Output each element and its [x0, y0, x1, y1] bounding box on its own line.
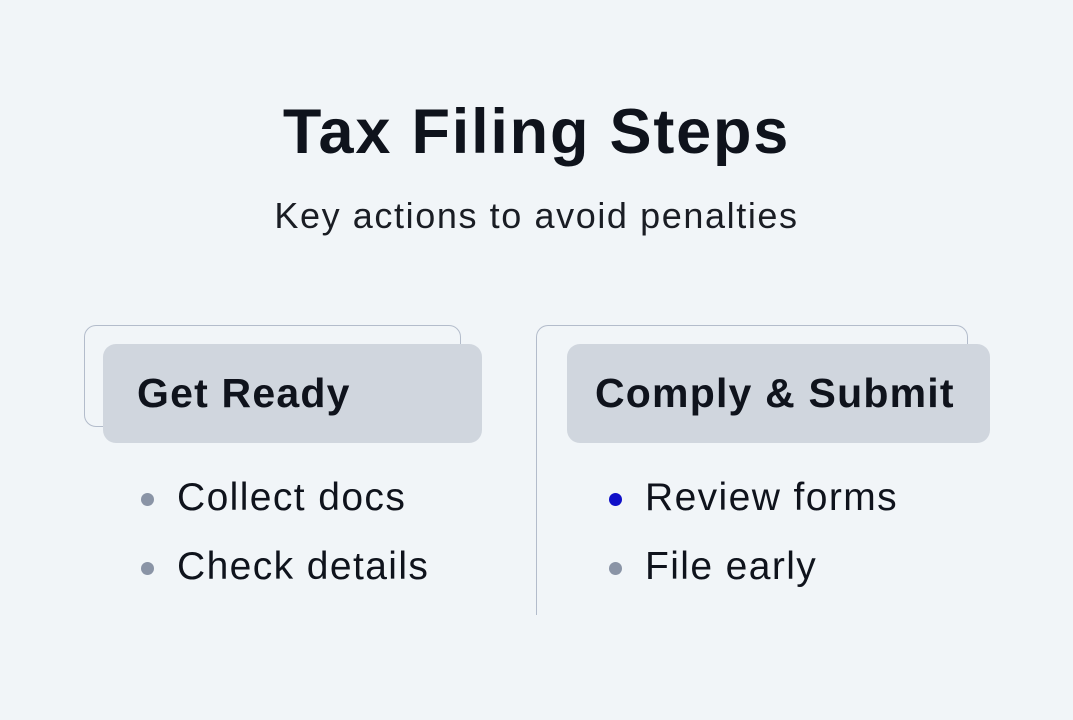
title: Tax Filing Steps — [283, 97, 790, 167]
heading: Comply & Submit: Comply & Submit — [595, 370, 955, 416]
heading: Get Ready — [103, 344, 482, 443]
panel: get ready — [84, 325, 482, 588]
heading: Comply & Submit — [567, 344, 990, 443]
outline frame — [84, 325, 461, 427]
subtitle: Key actions to avoid penalties — [274, 195, 799, 236]
heading: Get Ready: Get Ready — [137, 370, 351, 416]
panel: comply & submit — [536, 325, 990, 615]
item: Collect docs: Collect docs — [177, 476, 406, 519]
item: Check details: Check details — [177, 545, 429, 588]
frame line — [536, 325, 968, 615]
item: File early: File early — [645, 545, 817, 588]
item: Review forms: Review forms — [645, 476, 898, 519]
